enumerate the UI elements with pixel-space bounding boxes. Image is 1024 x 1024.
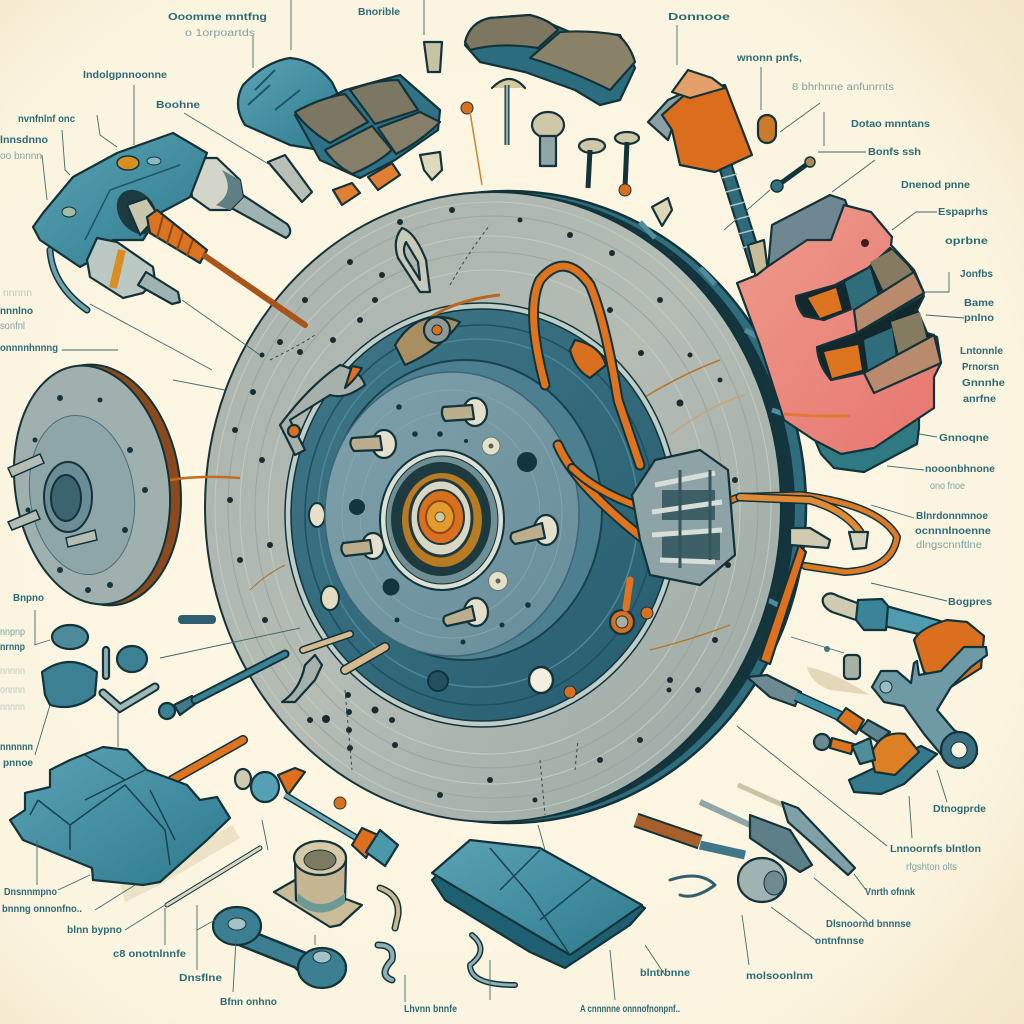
upper window bbox=[796, 248, 914, 320]
labels: top left: sonfnl bbox=[0, 321, 25, 332]
labels: top left: oo bnnnn bbox=[0, 151, 42, 162]
studs bbox=[8, 454, 97, 547]
labels: top and right: ono fnoe bbox=[930, 481, 965, 492]
lower cylinder band bbox=[113, 250, 122, 288]
upper sleeve bbox=[856, 599, 888, 630]
orange rod bbox=[205, 256, 305, 325]
link pin bbox=[777, 162, 810, 186]
bottom-left blue block bbox=[10, 740, 243, 902]
labels: top and right: rfgshton olts bbox=[906, 862, 957, 873]
small cap bbox=[652, 198, 672, 226]
orange clamp bbox=[278, 768, 305, 795]
orange threaded cone bbox=[147, 210, 207, 263]
shadow bbox=[120, 825, 240, 902]
labels: top and right: Bogpres bbox=[948, 596, 992, 608]
block seams bbox=[30, 755, 175, 865]
caliper body details bbox=[62, 156, 180, 242]
orange collar bbox=[352, 828, 378, 858]
upper strap tan part bbox=[854, 272, 924, 333]
upper cylinder bbox=[190, 158, 243, 210]
labels: top and right: pnlno bbox=[964, 312, 994, 324]
orange rod bbox=[172, 740, 243, 780]
orange threads bbox=[157, 216, 193, 256]
labels: top and right: Donnooe bbox=[668, 11, 730, 23]
labels: top and right: Gnnnhe bbox=[962, 377, 1005, 389]
labels: left and bottom: blntrbnne bbox=[640, 967, 690, 979]
hose tube bbox=[50, 250, 87, 310]
labels: top and right: molsoonlnm bbox=[746, 970, 813, 982]
orange part with threaded rod bbox=[648, 70, 815, 272]
cylinder bbox=[295, 850, 346, 910]
left small disc bbox=[0, 354, 240, 616]
bottom-left small parts bbox=[42, 615, 285, 719]
lower orange pad bbox=[824, 345, 862, 378]
labels: top and right: Dtnogprde bbox=[933, 803, 986, 815]
grey neck bbox=[860, 720, 890, 742]
link arm bbox=[213, 907, 346, 988]
lower piston rod bbox=[138, 272, 180, 304]
labels: top left: onnnnhnnng bbox=[0, 342, 58, 354]
small clip bbox=[670, 876, 715, 896]
lower teal pad bbox=[864, 328, 896, 370]
tapered tool bbox=[738, 785, 855, 875]
cylinder dark end bbox=[216, 170, 243, 210]
labels: left and bottom: onnnn bbox=[0, 685, 25, 696]
long thin rod bbox=[167, 848, 260, 905]
labels: left and bottom: Dnsflne bbox=[179, 972, 222, 984]
orange sleeve bbox=[837, 708, 864, 734]
long rod bbox=[195, 654, 285, 700]
grey bracket bbox=[648, 85, 708, 140]
labels: left and bottom: Dnsnnmpno bbox=[4, 886, 57, 898]
arm inner bbox=[225, 930, 315, 975]
silver mini caliper clamp bbox=[632, 450, 735, 585]
orange wire bbox=[170, 477, 240, 480]
long thin rod inner bbox=[167, 848, 260, 905]
bracket ring hole bbox=[951, 742, 967, 758]
hub bbox=[44, 462, 92, 532]
top opening bbox=[294, 841, 346, 875]
right eye centre bbox=[313, 951, 331, 963]
labels: top and right: Dnenod pnne bbox=[901, 179, 970, 191]
loose pins on disc edge bbox=[282, 634, 385, 702]
labels: top and right: 8 bhrhnne anfunrnts bbox=[792, 82, 894, 93]
orange pin bbox=[461, 102, 482, 185]
bracket upper eye bbox=[880, 681, 892, 693]
pink caliper bbox=[737, 195, 941, 472]
labels: top left: nnnlno bbox=[0, 305, 33, 317]
bottom right tools bbox=[636, 785, 855, 902]
labels: top and right: ocnnnlnoenne bbox=[915, 525, 991, 537]
disc friction face bbox=[205, 192, 781, 822]
lower brown pad bbox=[891, 312, 927, 356]
disc surface cracks and scratches bbox=[250, 225, 745, 815]
labels: top left: lnnsdnno bbox=[0, 134, 48, 146]
orange plug bbox=[830, 738, 854, 754]
wheel studs bbox=[341, 398, 558, 626]
labels: top and right: Gnnoqne bbox=[939, 432, 989, 444]
labels: left and bottom: Lhvnn bnnfe bbox=[404, 1003, 457, 1015]
collar bbox=[117, 646, 147, 672]
labels: left and bottom: nrnnp bbox=[0, 641, 25, 653]
labels: left and bottom: nnnnn bbox=[0, 666, 25, 677]
labels: left and bottom bbox=[0, 592, 690, 1015]
blue bobbin bbox=[251, 772, 279, 802]
orange top cap bbox=[672, 70, 725, 98]
lower right rod and base bbox=[747, 675, 937, 794]
bottom blue brake pad bbox=[432, 840, 645, 968]
orange hoses on disc bbox=[280, 228, 897, 664]
labels: left and bottom: nnpnp bbox=[0, 627, 25, 638]
labels: top and right: Blnrdonnmnoe bbox=[916, 510, 988, 522]
disc drill holes bbox=[227, 207, 738, 802]
labels: left and bottom: c8 onotnlnnfe bbox=[113, 948, 186, 960]
capsule bbox=[758, 115, 776, 143]
labels: top and right: Prnorsn bbox=[962, 361, 999, 373]
connecting rod bbox=[174, 696, 195, 715]
lower strap tan part bbox=[864, 335, 941, 393]
spring tool bbox=[700, 802, 812, 872]
bracket arm bbox=[872, 647, 987, 768]
labels: left and bottom: pnnoe bbox=[3, 757, 33, 769]
threaded coupling bbox=[747, 675, 801, 706]
labels: top and right: Bame bbox=[964, 297, 994, 309]
orange rod inner bbox=[172, 740, 243, 780]
ring washer bbox=[52, 625, 88, 649]
top brake pads bbox=[465, 15, 635, 105]
threaded rod bbox=[720, 160, 765, 272]
bore bbox=[304, 850, 336, 870]
labels: top and right: nooonbhnone bbox=[925, 463, 995, 475]
rust rim bbox=[4, 354, 196, 616]
labels: top and right: Bnorible bbox=[358, 6, 400, 18]
labels: top left: Ooomme mntfng bbox=[168, 11, 267, 23]
valve bbox=[42, 662, 97, 707]
small ring bbox=[814, 734, 830, 750]
right eye bbox=[298, 948, 346, 988]
main brake disc bbox=[205, 191, 806, 823]
long blue rod bbox=[796, 696, 840, 716]
tan cap bbox=[420, 152, 442, 180]
base plate bbox=[849, 746, 937, 794]
labels: top and right: ontnfnnse bbox=[815, 935, 864, 947]
orange yoke bbox=[914, 620, 984, 687]
bolt silver bbox=[532, 112, 564, 166]
cube two bbox=[368, 163, 400, 190]
central hub bearing bbox=[380, 450, 504, 590]
labels: top and right: wnonn pnfs, bbox=[736, 52, 802, 64]
small hardware row bbox=[268, 42, 672, 226]
orange body bbox=[662, 85, 752, 172]
green band bbox=[297, 893, 345, 912]
top cup bbox=[424, 42, 442, 72]
link pin end bbox=[771, 180, 783, 192]
coil wrapped bolt bbox=[636, 820, 786, 902]
bottom rod assembly bbox=[167, 768, 398, 905]
floor shadow bbox=[807, 667, 870, 695]
block body bbox=[10, 747, 230, 885]
hat section pale ring bbox=[285, 303, 679, 727]
teal base bbox=[815, 405, 919, 472]
labels: top and right: Dlsnoornd bnnnse bbox=[826, 918, 911, 930]
labels: top left: nnnnn bbox=[3, 288, 32, 299]
right lower bracket assembly bbox=[807, 593, 987, 768]
hat section bbox=[291, 309, 673, 721]
disc outer rim bbox=[210, 191, 806, 823]
blue caliper bbox=[238, 58, 350, 150]
labels: left and bottom: Bnpno bbox=[13, 592, 44, 604]
blue end bbox=[366, 830, 398, 866]
labels: left and bottom: A cnnnnne onnnofnonpnf.. bbox=[580, 1003, 680, 1015]
hub plate holes bbox=[349, 404, 537, 644]
labels: top left: o 1orpoartds bbox=[185, 28, 255, 39]
long rod inner bbox=[195, 654, 285, 700]
hub bore bbox=[51, 475, 81, 521]
labels: left and bottom: blnn bypno bbox=[67, 924, 122, 936]
labels: top and right: Dotao mnntans bbox=[851, 118, 930, 130]
bushing on plate bbox=[274, 841, 362, 927]
pink body bbox=[737, 205, 941, 454]
coil spring bbox=[844, 655, 860, 679]
small pin two bbox=[615, 132, 639, 196]
long rod inner bbox=[796, 696, 840, 716]
labels: top left bbox=[0, 11, 267, 354]
seal capsule bbox=[178, 615, 216, 624]
top blue caliper with grey pads bbox=[238, 58, 440, 178]
labels: top left: Boohne bbox=[156, 99, 200, 111]
lower window bbox=[817, 296, 934, 380]
labels: top left: Indolgpnnoonne bbox=[83, 69, 167, 81]
upper tip bbox=[823, 593, 860, 620]
labels: left and bottom: nnnnn bbox=[0, 702, 25, 713]
pin bbox=[103, 647, 109, 679]
upper piston rod bbox=[224, 190, 290, 238]
Y bracket inner bbox=[103, 687, 155, 708]
small cube bbox=[333, 183, 360, 205]
hose tube inner bbox=[50, 250, 87, 310]
labels: top left: nvnfnlnf onc bbox=[18, 113, 75, 125]
labels: top and right: Bonfs ssh bbox=[868, 146, 921, 158]
pink hole bbox=[861, 239, 869, 247]
plate bbox=[274, 880, 362, 927]
small pin one bbox=[579, 139, 605, 188]
left eye centre bbox=[228, 918, 246, 930]
small clips bbox=[378, 888, 515, 985]
lower cylinder bbox=[87, 238, 155, 298]
left eye bbox=[213, 907, 261, 945]
upper teal pad bbox=[845, 268, 878, 310]
labels: top and right: oprbne bbox=[945, 235, 988, 247]
labels: top and right: dlngscnnftlne bbox=[916, 540, 982, 551]
orange strip bbox=[784, 414, 850, 416]
pad backing bbox=[295, 75, 440, 178]
labels: left and bottom: nnnnnn bbox=[0, 741, 33, 753]
arm bbox=[225, 930, 315, 975]
caliper body bbox=[33, 133, 207, 267]
caliper bands bbox=[248, 70, 300, 110]
labels: top and right: Jonfbs bbox=[960, 268, 993, 280]
threads bbox=[722, 174, 757, 248]
labels: top and right: Lnnoornfs blntlon bbox=[890, 843, 981, 855]
inner ring bbox=[19, 409, 145, 581]
blue plug bbox=[852, 738, 875, 764]
pad friction blocks bbox=[295, 80, 440, 174]
grey face bbox=[0, 355, 185, 615]
tan stub bbox=[748, 240, 768, 278]
grey top block bbox=[768, 195, 860, 268]
labels: top and right: Espaprhs bbox=[938, 206, 988, 218]
labels: top and right: Lntonnle bbox=[960, 345, 1003, 357]
link pin head bbox=[805, 157, 815, 167]
orange knuckle bbox=[871, 733, 919, 775]
rod inner bbox=[285, 795, 360, 840]
tip cap bbox=[235, 769, 251, 789]
labels: top and right bbox=[358, 6, 1005, 982]
rod end bbox=[159, 703, 175, 719]
bracket lower ring bbox=[941, 732, 977, 768]
labels: left and bottom: Bfnn onhno bbox=[220, 996, 277, 1008]
labels: top and right: anrfne bbox=[963, 393, 996, 405]
hub mounting plate bbox=[325, 360, 602, 660]
small washer bbox=[824, 646, 830, 652]
holes bbox=[26, 395, 148, 593]
Y bracket bbox=[103, 687, 155, 708]
labels: left and bottom: bnnng onnonfno.. bbox=[2, 903, 82, 915]
upper orange pad bbox=[808, 288, 842, 318]
upper blue rod bbox=[884, 606, 944, 640]
T pin bbox=[492, 79, 525, 145]
rod bbox=[285, 795, 360, 840]
upper brown pad bbox=[870, 250, 912, 292]
orange ball bbox=[334, 797, 346, 809]
top-left blue caliper bbox=[33, 133, 305, 325]
grey bolt near caliper bbox=[268, 155, 312, 202]
labels: top and right: Vnrth ofnnk bbox=[865, 886, 915, 898]
